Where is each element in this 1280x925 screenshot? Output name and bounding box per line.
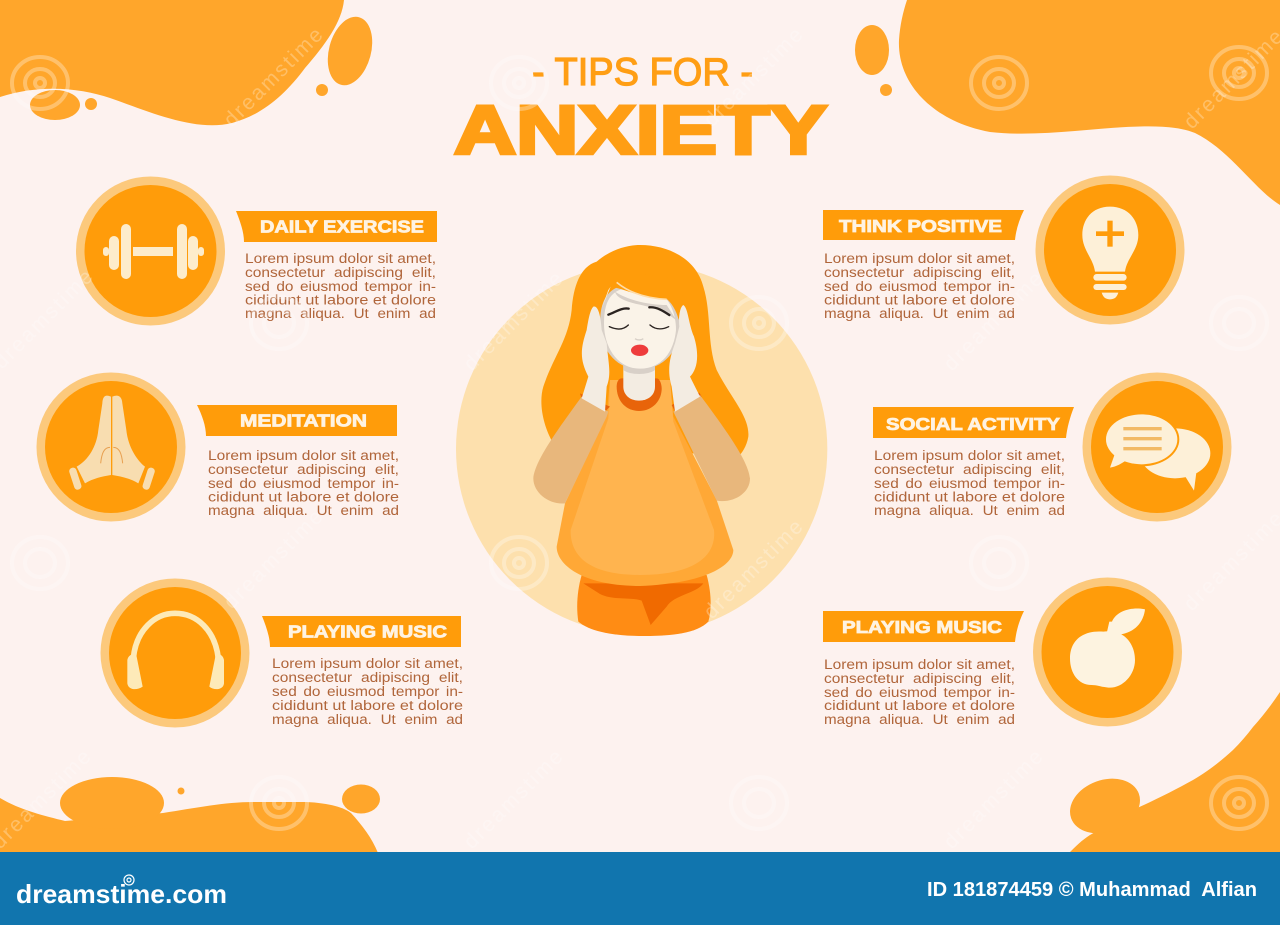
footer bar xyxy=(0,852,1280,925)
sweater xyxy=(557,380,733,586)
sleeves xyxy=(533,397,608,503)
top-left decorative blob xyxy=(0,0,379,125)
title xyxy=(454,51,827,168)
title line: anxiety: ANXIETY xyxy=(454,92,827,168)
watermark overlay: dreamstime xyxy=(459,267,567,376)
central illustration: woman holding her head xyxy=(456,245,827,636)
banner: playing music (left): PLAYING MUSIC xyxy=(288,622,447,642)
banner: think positive xyxy=(823,210,1024,240)
text block: social activity: consectetur adipiscing elit, xyxy=(874,462,1065,477)
banner: daily exercise: DAILY EXERCISE xyxy=(260,216,424,236)
icon: apple xyxy=(1033,578,1182,726)
text block: playing music (right): Lorem ipsum dolor sit amet, xyxy=(824,657,1015,672)
watermark overlay: dreamstime xyxy=(219,23,327,132)
text block: playing music (right) xyxy=(824,657,1015,727)
text block: social activity: Lorem ipsum dolor sit amet, xyxy=(874,448,1065,463)
banner: playing music (right): PLAYING MUSIC xyxy=(842,617,1002,637)
watermark overlay: dreamstime xyxy=(939,745,1047,854)
text block: playing music (right): sed do eiusmod tempor in- xyxy=(824,685,1015,700)
text block: think positive xyxy=(824,251,1015,321)
collar and neck xyxy=(617,363,662,411)
footer credit text: ID 181874459 © Muhammad Alfian xyxy=(927,879,1257,901)
banner: playing music (right) xyxy=(823,611,1024,642)
panel: think positive xyxy=(823,176,1184,324)
watermark overlay: dreamstime xyxy=(699,23,807,132)
banner: think positive: THINK POSITIVE xyxy=(839,216,1002,236)
text block: daily exercise xyxy=(245,251,436,321)
text block: daily exercise: consectetur adipiscing elit, xyxy=(245,265,436,280)
text block: daily exercise: sed do eiusmod tempor in- xyxy=(245,279,436,294)
panel: playing music (left) xyxy=(100,578,463,728)
panel: meditation xyxy=(36,372,399,522)
panel: daily exercise xyxy=(76,176,437,326)
text block: playing music (right): consectetur adipiscing elit, xyxy=(824,671,1015,686)
icon: dumbbell xyxy=(76,176,225,326)
face xyxy=(600,270,685,369)
icon: speech bubbles xyxy=(1082,372,1232,522)
text block: playing music (left): sed do eiusmod tempor in- xyxy=(272,684,463,699)
text block: playing music (right): cididunt ut labore et dolore xyxy=(824,698,1015,713)
banner: playing music (left) xyxy=(262,616,461,647)
text block: daily exercise: magna aliqua. Ut enim ad xyxy=(245,306,436,321)
panel: playing music (right) xyxy=(823,578,1182,727)
watermark overlay: dreamstime xyxy=(459,745,567,854)
text block: meditation: consectetur adipiscing elit, xyxy=(208,462,399,477)
icon: light bulb xyxy=(1036,176,1184,324)
text block: think positive: consectetur adipiscing elit, xyxy=(824,265,1015,280)
watermark overlay: dreamstime xyxy=(219,505,327,614)
icon: headphones xyxy=(100,578,250,728)
text block: think positive: sed do eiusmod tempor in- xyxy=(824,279,1015,294)
banner: meditation xyxy=(197,405,397,436)
text block: meditation: sed do eiusmod tempor in- xyxy=(208,476,399,491)
banner: meditation: MEDITATION xyxy=(240,410,367,430)
lips xyxy=(631,345,648,356)
text block: playing music (left): Lorem ipsum dolor sit amet, xyxy=(272,656,463,671)
text block: think positive: cididunt ut labore et dolore xyxy=(824,292,1015,308)
background circle xyxy=(456,263,827,635)
text block: think positive: magna aliqua. Ut enim ad xyxy=(824,306,1015,321)
text block: meditation: Lorem ipsum dolor sit amet, xyxy=(208,448,399,463)
banner: social activity xyxy=(873,407,1074,438)
watermark overlay: dreamstime xyxy=(939,267,1047,376)
hands xyxy=(582,306,609,412)
bottom-left decorative blob xyxy=(0,777,380,853)
skirt xyxy=(577,575,711,636)
hair xyxy=(541,245,748,457)
banner: daily exercise xyxy=(236,211,437,242)
text block: social activity: cididunt ut labore et dolore xyxy=(874,490,1065,504)
text block: playing music (left): magna aliqua. Ut enim ad xyxy=(272,712,463,727)
text block: daily exercise: cididunt ut labore et dolore xyxy=(245,292,436,308)
top-right decorative blob xyxy=(855,0,1280,205)
icon: praying hands xyxy=(36,372,186,522)
text block: playing music (left): consectetur adipiscing elit, xyxy=(272,670,463,685)
watermark overlay: dreamstime xyxy=(699,515,807,624)
nose xyxy=(635,339,643,340)
panel: social activity xyxy=(873,372,1232,522)
bottom-right decorative blob xyxy=(1062,692,1280,853)
text block: social activity xyxy=(874,448,1065,518)
text block: playing music (left) xyxy=(272,656,463,727)
footer logo text: dreamstime.com xyxy=(16,879,227,909)
closed eyes xyxy=(609,325,669,329)
text block: social activity: magna aliqua. Ut enim ad xyxy=(874,503,1065,518)
text block: playing music (left): cididunt ut labore et dolore xyxy=(272,698,463,713)
banner: social activity: SOCIAL ACTIVITY xyxy=(886,414,1060,434)
text block: daily exercise: Lorem ipsum dolor sit amet, xyxy=(245,251,436,266)
text block: meditation: magna aliqua. Ut enim ad xyxy=(208,503,399,518)
text block: social activity: sed do eiusmod tempor in- xyxy=(874,476,1065,491)
text block: meditation: cididunt ut labore et dolore xyxy=(208,490,399,504)
eyebrows xyxy=(608,307,669,315)
text block: meditation xyxy=(208,448,399,518)
title line: tips for: - TIPS FOR - xyxy=(532,51,753,94)
text block: playing music (right): magna aliqua. Ut enim ad xyxy=(824,712,1015,727)
footer logo spiral xyxy=(124,875,134,885)
text block: think positive: Lorem ipsum dolor sit amet, xyxy=(824,251,1015,266)
